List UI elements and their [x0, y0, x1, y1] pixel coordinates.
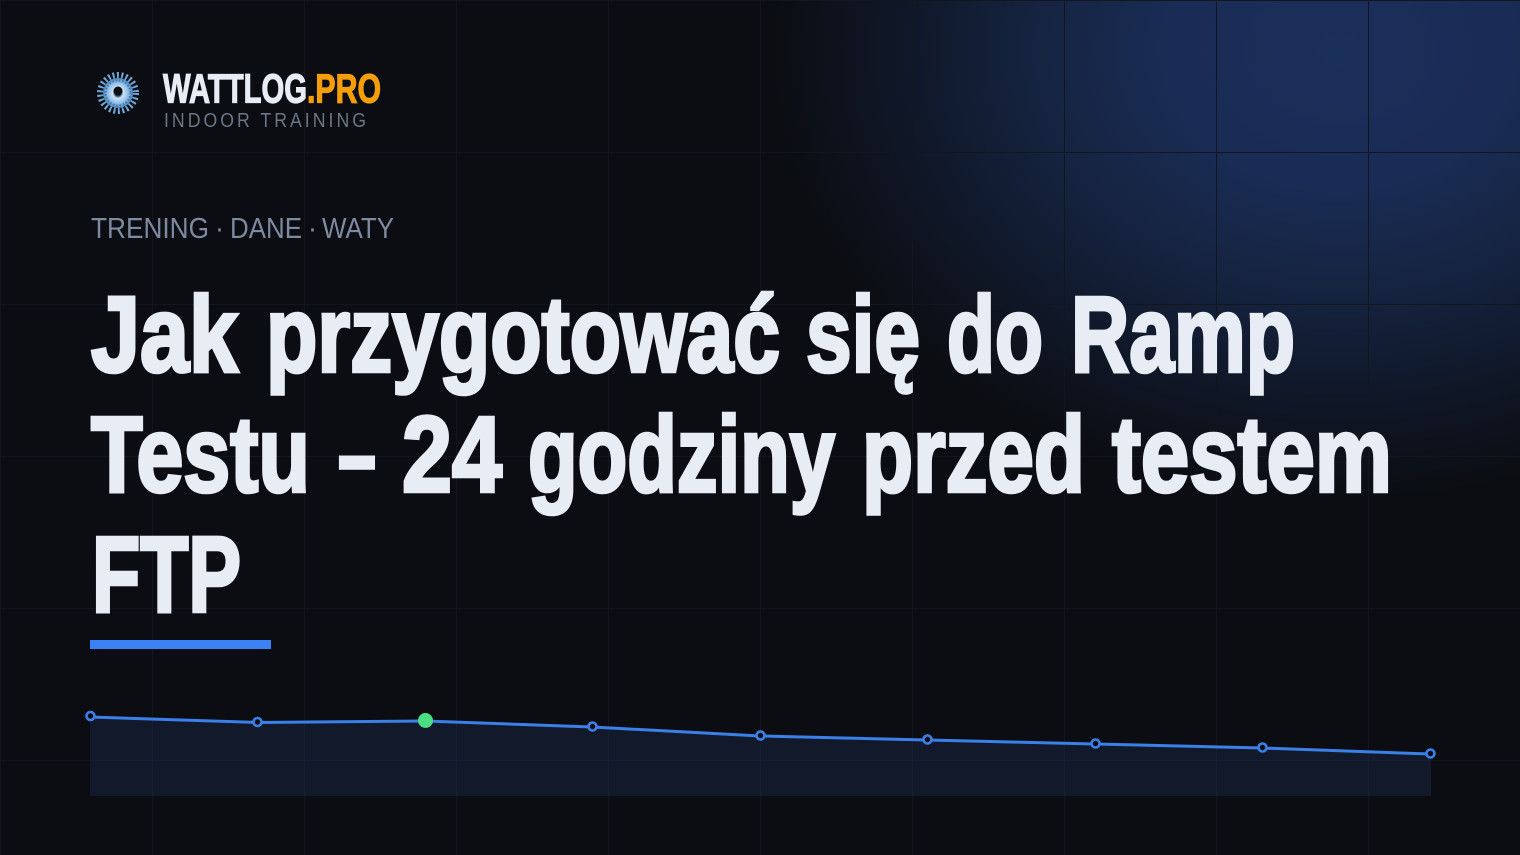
tagline: INDOOR TRAINING: [164, 110, 369, 132]
title: [91, 274, 1392, 634]
title: –: [338, 394, 376, 514]
title: FTP: [92, 514, 241, 634]
wordmark: .PRO: [307, 66, 381, 112]
chart line: [90, 717, 1430, 754]
title: godziny: [528, 394, 835, 514]
icon: cassette cog: [100, 75, 136, 111]
title: Testu: [91, 394, 310, 514]
highlighted point: [418, 713, 433, 728]
eyebrow: ·: [308, 213, 317, 245]
eyebrow: DANE: [230, 213, 302, 245]
title: do: [947, 274, 1043, 394]
eyebrow: TRENING: [91, 213, 209, 245]
eyebrow: [91, 213, 394, 245]
line chart: [86, 712, 1434, 796]
title underline: [90, 640, 271, 649]
logo: [100, 66, 381, 132]
data points: [86, 712, 1434, 758]
chart area: [90, 717, 1431, 796]
title: się: [806, 274, 920, 394]
title: przygotować: [266, 274, 780, 394]
title: 24: [402, 394, 502, 514]
title: Ramp: [1071, 274, 1295, 394]
title: Jak: [91, 274, 239, 394]
eyebrow: WATY: [322, 213, 394, 245]
title: przed: [862, 394, 1085, 514]
title: testem: [1112, 394, 1392, 514]
wordmark: WATTLOG: [163, 66, 307, 112]
eyebrow: ·: [215, 213, 224, 245]
